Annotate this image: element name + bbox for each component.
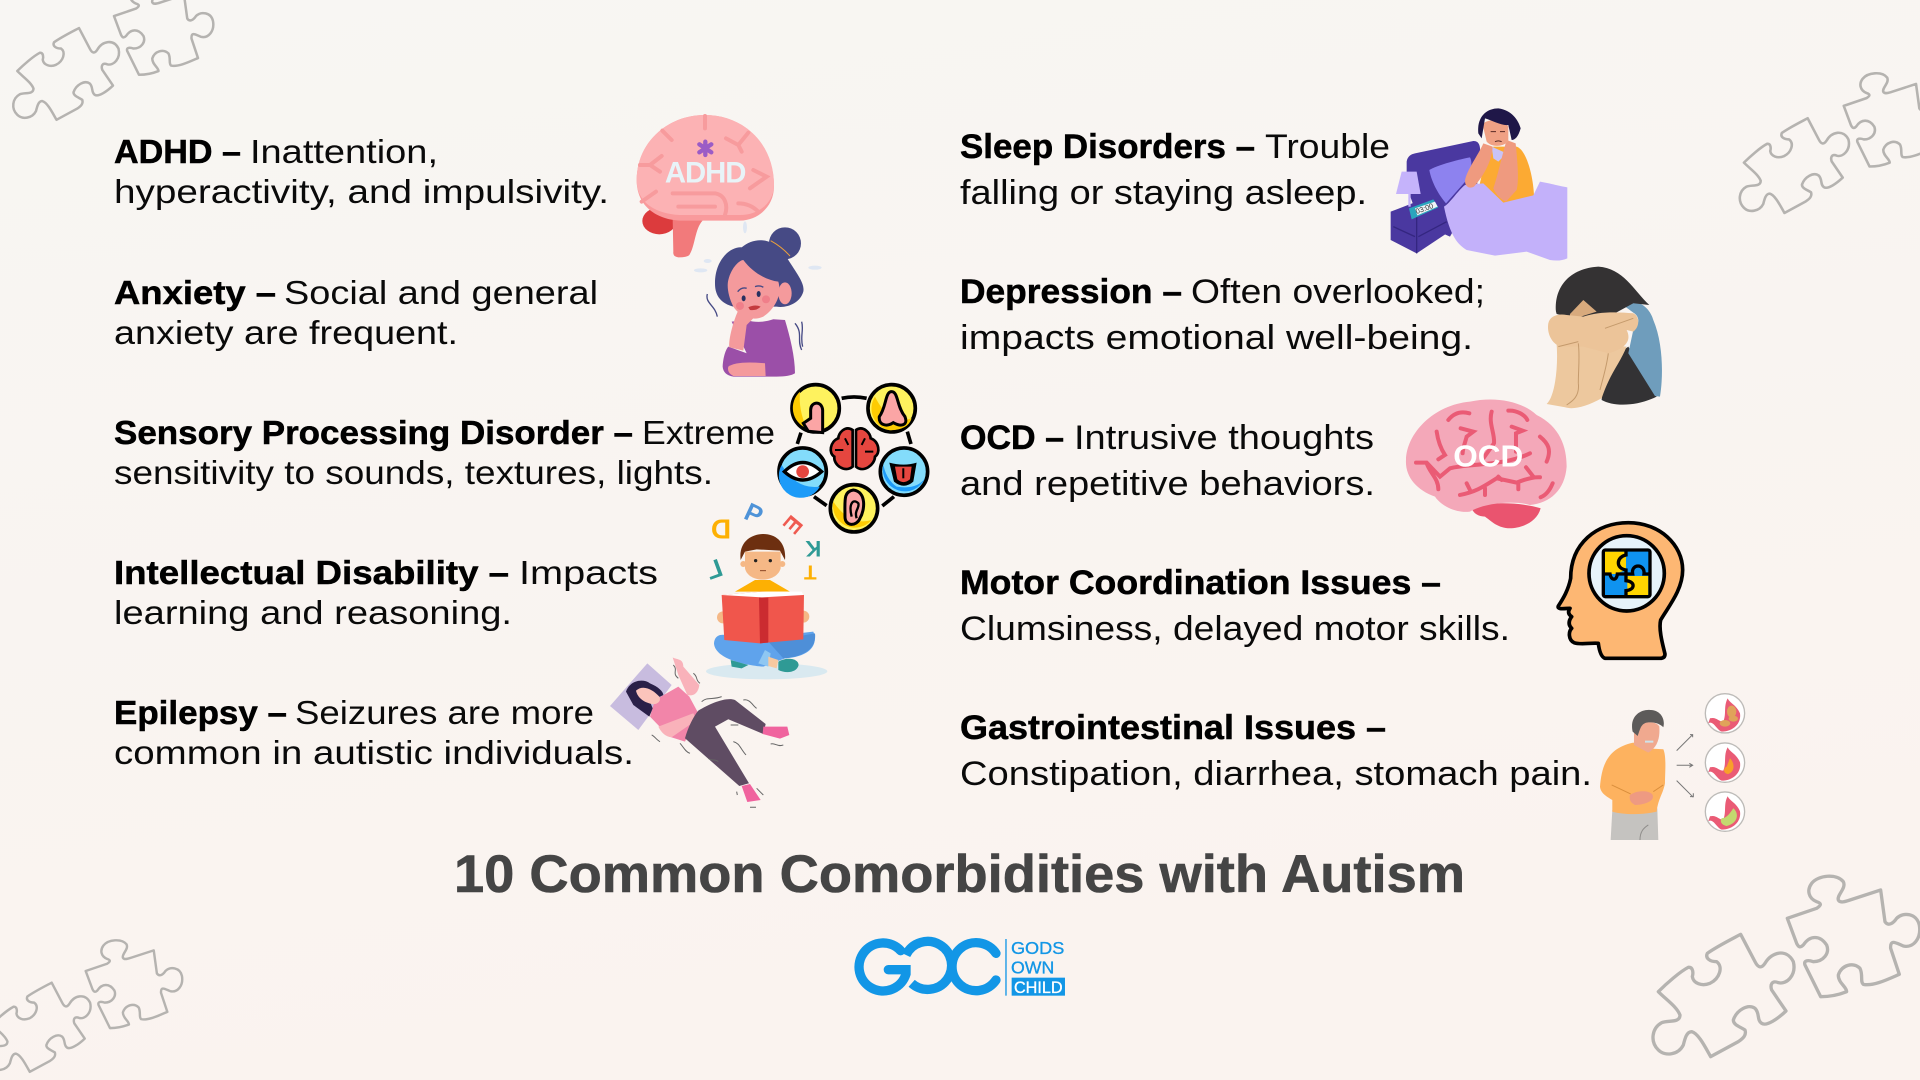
- icon: anxious girl: [694, 221, 822, 377]
- text block: Sensory Processing Disorder: [114, 414, 775, 491]
- icon: boy reading with letters: P: [740, 498, 767, 531]
- title: 10 Common Comorbidities with Autism: [454, 845, 1465, 904]
- icon: boy reading with letters: L: [702, 554, 726, 586]
- icon: OCD brain: OCD: [1453, 440, 1523, 474]
- decoration: puzzle pieces top right: [1740, 73, 1920, 213]
- text block: ADHD: ADHD –: [114, 133, 241, 170]
- text block: Intellectual Disability: Impacts: [519, 554, 658, 591]
- icon: girl awake in bed: [1391, 108, 1567, 261]
- text block: Intellectual Disability: [114, 554, 658, 631]
- text block: Anxiety: anxiety are frequent.: [114, 314, 458, 351]
- text block: OCD: [960, 419, 1375, 503]
- text block: Motor Coordination Issues: Motor Coordination Issues –: [960, 564, 1441, 602]
- icon: boy reading with letters: D: [711, 513, 731, 544]
- text block: Depression: Often overlooked;: [1191, 273, 1485, 311]
- text block: ADHD: hyperactivity, and impulsivity.: [114, 173, 609, 210]
- text block: ADHD: Inattention,: [250, 133, 438, 170]
- icon: depressed person hugging knees: [1547, 267, 1662, 408]
- icon: girl awake in bed: 03:00: [1414, 201, 1435, 216]
- text block: Sleep Disorders: [960, 128, 1390, 212]
- logo: Gods Own Child: CHILD: [1014, 978, 1063, 997]
- text block: Depression: [960, 273, 1485, 357]
- text block: Sleep Disorders: falling or staying asleep.: [960, 174, 1367, 212]
- decoration: puzzle pieces bottom right: [1653, 876, 1920, 1057]
- text block: Sensory Processing Disorder: sensitivity to sounds, textures, lights.: [114, 454, 713, 491]
- text block: Depression: Depression –: [960, 273, 1182, 311]
- text block: ADHD: [114, 133, 609, 210]
- text block: OCD: and repetitive behaviors.: [960, 465, 1375, 503]
- text block: Anxiety: Anxiety –: [114, 274, 276, 311]
- text block: Gastrointestinal Issues: Constipation, diarrhea, stomach pain.: [960, 755, 1592, 793]
- icon: boy reading with letters: K: [805, 536, 821, 561]
- text block: Epilepsy: common in autistic individuals.: [114, 734, 634, 771]
- icon: five senses cluster: [779, 385, 928, 532]
- text block: OCD: Intrusive thoughts: [1074, 419, 1374, 457]
- icon: person having a seizure: [610, 657, 789, 807]
- icon: boy reading with letters: [702, 498, 827, 679]
- logo: Gods Own Child: OWN: [1011, 957, 1054, 977]
- icon: boy reading with letters: T: [804, 561, 817, 584]
- text block: Intellectual Disability: learning and reasoning.: [114, 594, 512, 631]
- icon: head with puzzle: [1558, 523, 1683, 658]
- text block: Epilepsy: Seizures are more: [295, 694, 594, 731]
- text block: Anxiety: [114, 274, 598, 351]
- text block: Epilepsy: Epilepsy –: [114, 694, 287, 731]
- decoration: puzzle pieces top left: [13, 0, 213, 120]
- text block: Gastrointestinal Issues: Gastrointestinal Issues –: [960, 709, 1386, 747]
- decoration: puzzle pieces bottom left: [0, 940, 182, 1072]
- text block: Depression: impacts emotional well-being.: [960, 319, 1473, 357]
- icon: OCD brain: [1406, 399, 1567, 528]
- logo: Gods Own Child: GODS: [1011, 938, 1064, 958]
- text block: Motor Coordination Issues: [960, 564, 1510, 648]
- icon: ADHD brain: ADHD: [665, 157, 746, 190]
- text block: Sleep Disorders: Trouble: [1265, 128, 1390, 166]
- logo: Gods Own Child: [859, 938, 1065, 997]
- text block: Sensory Processing Disorder: Extreme: [642, 414, 775, 451]
- text block: Motor Coordination Issues: Clumsiness, delayed motor skills.: [960, 610, 1510, 648]
- text block: Gastrointestinal Issues: [960, 709, 1592, 793]
- icon: man with stomach pain: [1600, 694, 1745, 840]
- text block: Epilepsy: [114, 694, 634, 771]
- text block: Intellectual Disability: Intellectual Disability –: [114, 554, 509, 591]
- text block: Sleep Disorders: Sleep Disorders –: [960, 128, 1255, 166]
- text block: Anxiety: Social and general: [284, 274, 598, 311]
- text block: Sensory Processing Disorder: Sensory Processing Disorder –: [114, 414, 633, 451]
- icon: ADHD brain: [637, 115, 774, 257]
- icon: boy reading with letters: E: [778, 510, 808, 539]
- text block: OCD: OCD –: [960, 419, 1064, 457]
